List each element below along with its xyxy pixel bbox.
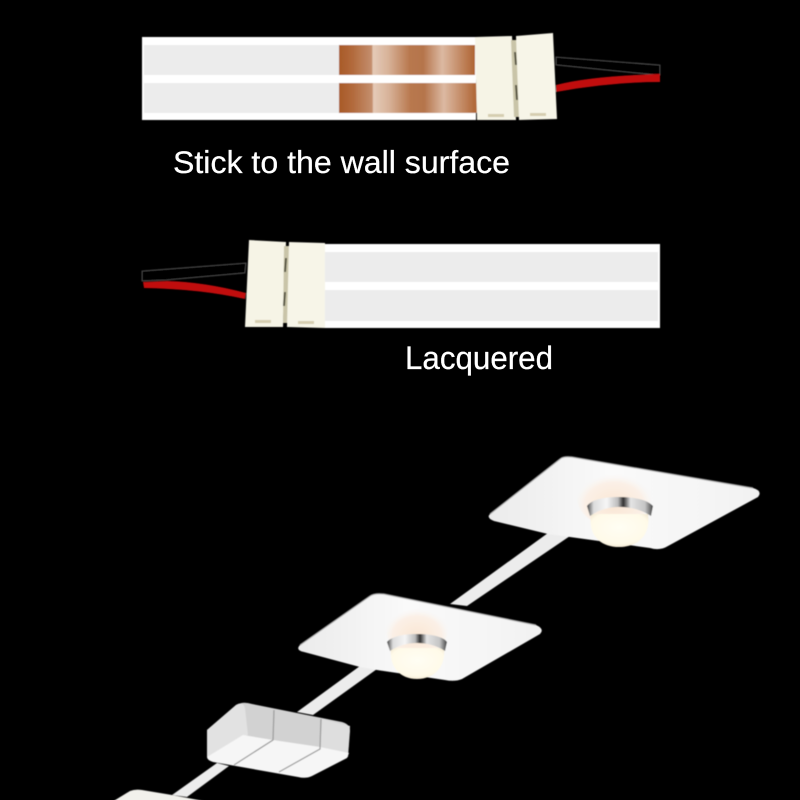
square mounting plate — [298, 594, 542, 681]
caption: lacquered: Lacquered — [405, 340, 553, 376]
chrome ring — [587, 497, 653, 516]
copper contact pads — [339, 45, 477, 113]
chrome ring — [387, 634, 447, 651]
light unit: lower — [298, 594, 542, 681]
plate top edge shadow — [300, 594, 536, 645]
globe — [591, 514, 648, 547]
grey bands — [325, 252, 658, 321]
glow on plate — [577, 470, 651, 526]
light unit: upper — [489, 457, 760, 549]
square mounting plate — [489, 457, 760, 549]
grey bands — [144, 45, 339, 113]
connector clip — [475, 33, 557, 120]
connector clip — [245, 240, 325, 328]
illustration: ceiling lights on a flat track — [112, 457, 760, 800]
globe — [391, 648, 444, 679]
plate top edge shadow — [490, 457, 753, 514]
white strip base — [142, 37, 476, 120]
track segments — [172, 533, 570, 797]
wires: black and red leads — [556, 57, 660, 92]
wires: black and red leads — [142, 263, 246, 299]
glow on plate — [386, 605, 448, 655]
panel: wall-surface strip with connector — [142, 33, 660, 120]
panel: lacquered strip with connector — [142, 240, 660, 328]
bottom plate, cropped — [112, 790, 225, 800]
caption: stick to the wall surface: Stick to the wall surface — [173, 144, 510, 180]
junction box — [207, 703, 350, 778]
white strip base — [325, 244, 660, 328]
